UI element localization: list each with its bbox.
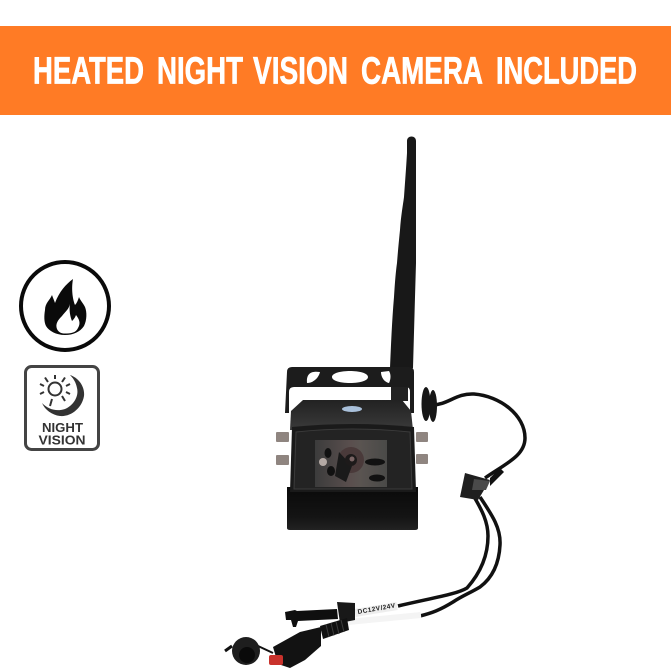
rubber grommet (422, 387, 437, 422)
white label sleeves (355, 606, 397, 613)
connector with tab (285, 602, 355, 627)
banner title: NIGHT (157, 50, 243, 92)
banner title: VISION (253, 50, 348, 92)
lens (338, 447, 364, 473)
camera product (225, 136, 525, 668)
antenna base (391, 387, 408, 401)
face trim (294, 429, 412, 489)
red button (269, 655, 283, 665)
cable: signal lead (420, 497, 500, 616)
logo badge (342, 406, 362, 412)
banner title: CAMERA (361, 50, 483, 92)
lower hood (287, 487, 418, 530)
banner (0, 26, 671, 115)
icon: flame in circle (21, 262, 109, 350)
moon (42, 375, 84, 416)
mounting bracket (285, 367, 414, 413)
lens window (315, 440, 387, 487)
LEDs (324, 448, 332, 458)
banner title (33, 50, 637, 92)
sun (40, 375, 70, 406)
icon: night vision badge: VISION (38, 432, 86, 448)
camera top housing (290, 400, 413, 430)
cable label text: DC12V/24V (357, 602, 396, 616)
side bolts (276, 432, 428, 465)
antenna (390, 136, 416, 368)
banner title: HEATED (33, 50, 144, 92)
power plug (273, 627, 321, 668)
splitter block (460, 473, 490, 500)
ribs (326, 620, 344, 637)
ribbed strain relief (320, 618, 349, 639)
badge label: NIGHT (42, 420, 83, 435)
flame inner (56, 304, 79, 334)
rubber cap (225, 637, 273, 665)
cable: grommet to splitter (432, 394, 525, 478)
icon: night vision badge (26, 366, 98, 450)
camera face (290, 424, 416, 492)
cable: power lead (398, 495, 488, 606)
